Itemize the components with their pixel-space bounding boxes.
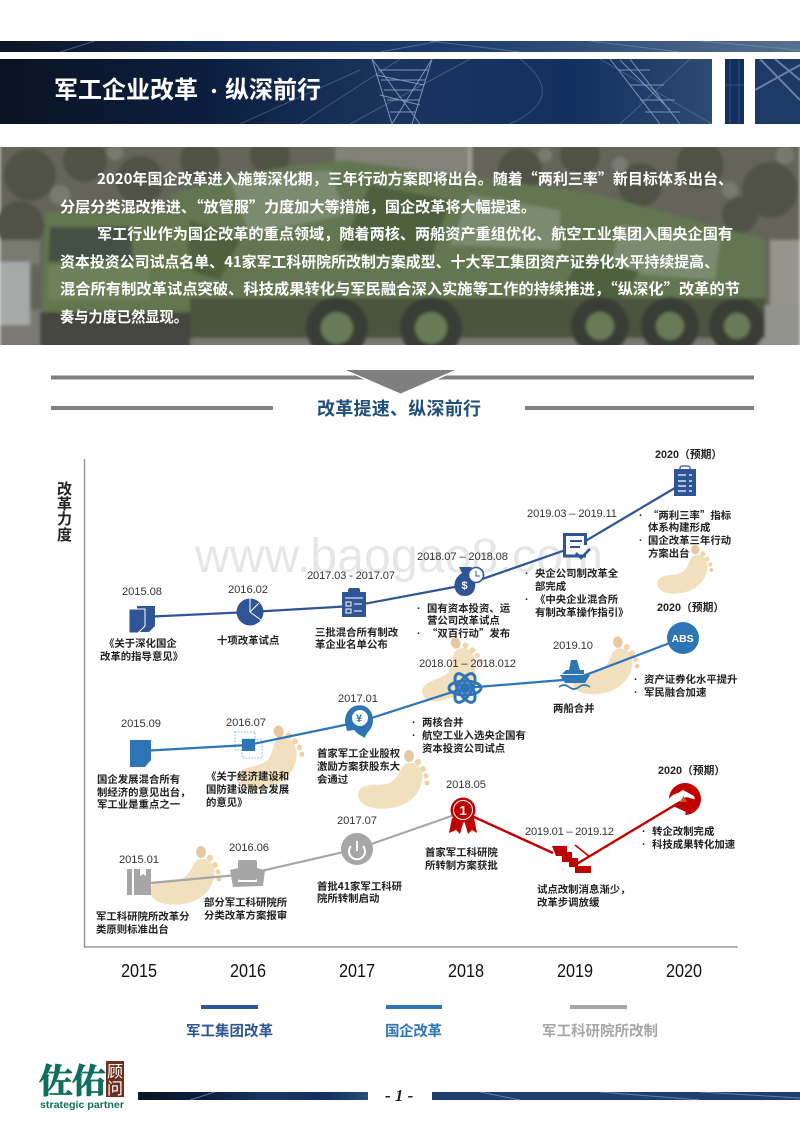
icon: head with yen bbox=[345, 705, 373, 738]
wheels bbox=[306, 296, 764, 345]
group 3 events: 军工科研院所改革分 bbox=[96, 908, 190, 923]
group 1 events: 《中央企业混合所 bbox=[535, 591, 619, 606]
y axis label: 力 bbox=[57, 511, 72, 528]
group 1 events: · bbox=[639, 510, 643, 522]
icon: dashed squares bbox=[235, 732, 262, 758]
intro paragraph: 2020年国企改革进入施策深化期，三年行动方案即将出台。随着“两利三率”新目标体系出台、 bbox=[97, 168, 733, 189]
group 2 events bbox=[97, 600, 738, 811]
group 2 events: 的意见》 bbox=[206, 794, 248, 809]
group 3 events: 科技成果转化加速 bbox=[652, 836, 736, 851]
group 2 events: 国防建设融合发展 bbox=[206, 781, 290, 796]
group 3 events: 2019.01 – 2019.12 bbox=[525, 826, 614, 838]
group 1 events: · bbox=[525, 568, 529, 580]
icon: document check bbox=[564, 534, 590, 558]
group 1 events: 2016.02 bbox=[228, 584, 268, 596]
x axis years bbox=[121, 961, 702, 981]
group 2 events: 首家军工企业股权 bbox=[317, 745, 401, 760]
group 2 events: 2019.10 bbox=[553, 640, 593, 652]
group 2 events: · bbox=[412, 717, 416, 729]
road bbox=[0, 309, 718, 345]
icon: money bag and clock: $ bbox=[462, 580, 468, 592]
truck flatbed bbox=[190, 298, 765, 338]
logo: strategic partner bbox=[40, 1099, 124, 1111]
logo: 佐佑 bbox=[39, 1054, 106, 1103]
group 3 events: 首批41家军工科研 bbox=[317, 878, 403, 893]
group 1 events: · bbox=[417, 628, 421, 640]
group 3 events: 试点改制消息渐少， bbox=[537, 881, 631, 896]
group 3 events: 2020（预期） bbox=[658, 763, 725, 777]
intro paragraph: 混合所有制改革试点突破、科技成果转化与军民融合深入实施等工作的持续推进，“纵深化”改革的节 bbox=[60, 278, 740, 299]
intro paragraph: 军工行业作为国企改革的重点领域，随着两核、两船资产重组优化、航空工业集团入围央企国有 bbox=[97, 223, 733, 244]
group 2 events: 2020（预期） bbox=[657, 600, 724, 614]
group 1 events: 体系构建形成 bbox=[648, 519, 711, 534]
group 3 events: 部分军工科研院所 bbox=[204, 894, 288, 909]
watermark: www.baogao8.com bbox=[194, 530, 603, 583]
group 1 events: 国企改革三年行动 bbox=[648, 532, 731, 547]
intro paragraph: 奏与力度已然显现。 bbox=[60, 306, 188, 327]
icon: red circular arrow bbox=[669, 783, 701, 815]
group 2 events: 资产证券化水平提升 bbox=[644, 671, 738, 686]
footer bars and page number: - 1 - bbox=[385, 1086, 414, 1105]
series line: red trend bbox=[463, 802, 680, 865]
group 1 events: 《关于深化国企 bbox=[104, 635, 177, 650]
group 1 events: 央企公司制改革全 bbox=[535, 565, 619, 580]
group 1 events: 2017.03 - 2017.07 bbox=[307, 570, 395, 582]
footprints bbox=[150, 543, 715, 905]
truck cab bbox=[40, 212, 200, 350]
series line: research institutes bbox=[139, 812, 463, 884]
group 1 events: 十项改革试点 bbox=[217, 632, 280, 647]
icon: atom bbox=[449, 671, 481, 705]
group 3 events: · bbox=[642, 826, 646, 838]
y axis label: 改 bbox=[57, 481, 72, 498]
group 2 events: 2016.07 bbox=[226, 717, 266, 729]
trees bbox=[0, 147, 798, 240]
icon: medal bbox=[449, 798, 477, 834]
group 3 events: 2017.07 bbox=[337, 815, 377, 827]
section heading: 改革提速、纵深前行 bbox=[317, 395, 481, 421]
logo: 问 bbox=[107, 1080, 123, 1098]
group 1 events: 有制改革操作指引》 bbox=[535, 604, 629, 619]
banner title text: 纵深前行 bbox=[225, 70, 321, 105]
x axis years: 2019 bbox=[557, 961, 593, 981]
group 3 events: 类原则标准出台 bbox=[96, 921, 169, 936]
group 3 events: 院所转制启动 bbox=[317, 890, 379, 905]
title banner bbox=[0, 59, 712, 124]
group 1 events: 2020（预期） bbox=[655, 447, 722, 461]
icon: checklist clipboard bbox=[674, 466, 696, 496]
intro paragraph: 资本投资公司试点名单、41家军工科研院所改制方案成型、十大军工集团资产证券化水平持续提高、 bbox=[60, 251, 719, 272]
icon: medal: 1 bbox=[460, 803, 467, 818]
group 1 events: · bbox=[417, 603, 421, 615]
group 1 events: · bbox=[525, 594, 529, 606]
group 1 events: · bbox=[639, 535, 643, 547]
photo panel with intro text bbox=[0, 147, 800, 345]
banner title text: 军工企业改革 bbox=[54, 70, 198, 105]
chart axes bbox=[84, 459, 738, 947]
group 2 events: · bbox=[412, 730, 416, 742]
group 1 events: 三批混合所有制改 bbox=[315, 624, 399, 639]
right building bbox=[770, 240, 800, 315]
x axis years: 2020 bbox=[666, 961, 702, 981]
legend: 国企改革 bbox=[385, 1022, 442, 1040]
legend bbox=[186, 1005, 658, 1040]
group 1 events: 2015.08 bbox=[122, 586, 162, 598]
series line: military groups bbox=[142, 482, 685, 617]
section heading bbox=[51, 368, 754, 421]
logo: 顾 bbox=[107, 1063, 123, 1081]
group 3 events: 首家军工科研院 bbox=[425, 844, 498, 859]
intro paragraph bbox=[60, 168, 740, 327]
icon: power circle bbox=[341, 833, 373, 865]
legend: 军工科研院所改制 bbox=[542, 1022, 658, 1040]
group 1 events: 2018.07 – 2018.08 bbox=[417, 551, 508, 563]
group 2 events: · bbox=[634, 687, 638, 699]
group 1 events: 2019.03 – 2019.11 bbox=[527, 508, 617, 520]
group 2 events: 两船合并 bbox=[553, 700, 595, 715]
footer bars and page number bbox=[138, 1086, 800, 1105]
group 1 events: 营公司改革试点 bbox=[427, 612, 500, 627]
group 1 events: 改革的指导意见》 bbox=[100, 648, 183, 663]
series line: SOE bbox=[141, 638, 683, 751]
group 3 events: 所转制方案获批 bbox=[425, 857, 498, 872]
x axis years: 2018 bbox=[448, 961, 484, 981]
group 2 events: 制经济的意见出台， bbox=[97, 784, 191, 799]
group 2 events: 两核合并 bbox=[422, 714, 464, 729]
group 3 events: 2015.01 bbox=[119, 854, 159, 866]
icon: seats bbox=[230, 860, 265, 887]
group 2 events: 会通过 bbox=[317, 771, 349, 786]
group 1 events bbox=[100, 447, 732, 663]
icon: head with yen: ¥ bbox=[356, 713, 363, 725]
y axis label bbox=[57, 481, 72, 544]
icon: book bbox=[127, 869, 151, 895]
group 1 events: 部完成 bbox=[535, 578, 567, 593]
icon: ABS circle bbox=[667, 622, 699, 654]
group 2 events: 2015.09 bbox=[121, 718, 161, 730]
icon: documents bbox=[129, 606, 155, 633]
icon: pie bbox=[236, 598, 264, 626]
y axis label: 革 bbox=[57, 495, 72, 513]
x axis years: 2015 bbox=[121, 961, 157, 981]
group 1 events: 方案出台 bbox=[648, 545, 690, 560]
group 2 events: 军工业是重点之一 bbox=[97, 796, 181, 811]
icon: clipboard bbox=[342, 588, 366, 617]
banner title text bbox=[54, 70, 321, 105]
group 3 events: 转企改制完成 bbox=[652, 823, 715, 838]
x axis years: 2017 bbox=[339, 961, 375, 981]
group 2 events: 《关于经济建设和 bbox=[206, 768, 289, 783]
group 3 events: · bbox=[642, 839, 646, 851]
icon: single document bbox=[130, 740, 151, 767]
group 2 events: 激励方案获股东大 bbox=[317, 758, 401, 773]
missile canister bbox=[170, 160, 765, 305]
icon: ABS circle: ABS bbox=[672, 633, 694, 645]
group 2 events: 2017.01 bbox=[338, 693, 378, 705]
header top stripe bbox=[0, 41, 800, 52]
group 1 events: “两利三率”指标 bbox=[648, 507, 732, 522]
group 3 events: 分类改革方案报审 bbox=[204, 907, 287, 922]
icon: money bag and clock bbox=[454, 567, 484, 596]
group 3 events: 改革步调放缓 bbox=[537, 894, 600, 909]
icon: ship bbox=[559, 660, 590, 689]
group 3 events: 2016.06 bbox=[229, 842, 269, 854]
y axis label: 度 bbox=[57, 526, 72, 544]
icon: falling stairs bbox=[552, 845, 591, 873]
group 1 events: 革企业名单公布 bbox=[315, 636, 388, 651]
group 2 events: 2018.01 – 2018.012 bbox=[419, 658, 516, 670]
group 2 events: 资本投资公司试点 bbox=[422, 740, 506, 755]
group 1 events: “双百行动”发布 bbox=[427, 625, 510, 640]
group 1 events: 国有资本投资、运 bbox=[427, 600, 511, 615]
group 2 events: · bbox=[634, 674, 638, 686]
intro paragraph: 分层分类混改推进、“放管服”力度加大等措施，国企改革将大幅提速。 bbox=[60, 196, 536, 217]
group 2 events: 国企发展混合所有 bbox=[97, 771, 180, 786]
group 3 events: 2018.05 bbox=[446, 779, 486, 791]
legend: 军工集团改革 bbox=[186, 1022, 273, 1040]
group 3 events bbox=[96, 763, 736, 936]
white van bbox=[0, 262, 30, 325]
logo bbox=[39, 1054, 124, 1111]
x axis years: 2016 bbox=[230, 961, 266, 981]
group 2 events: 航空工业入选央企国有 bbox=[422, 727, 526, 742]
group 2 events: 军民融合加速 bbox=[644, 684, 707, 699]
banner side blocks bbox=[725, 59, 800, 124]
